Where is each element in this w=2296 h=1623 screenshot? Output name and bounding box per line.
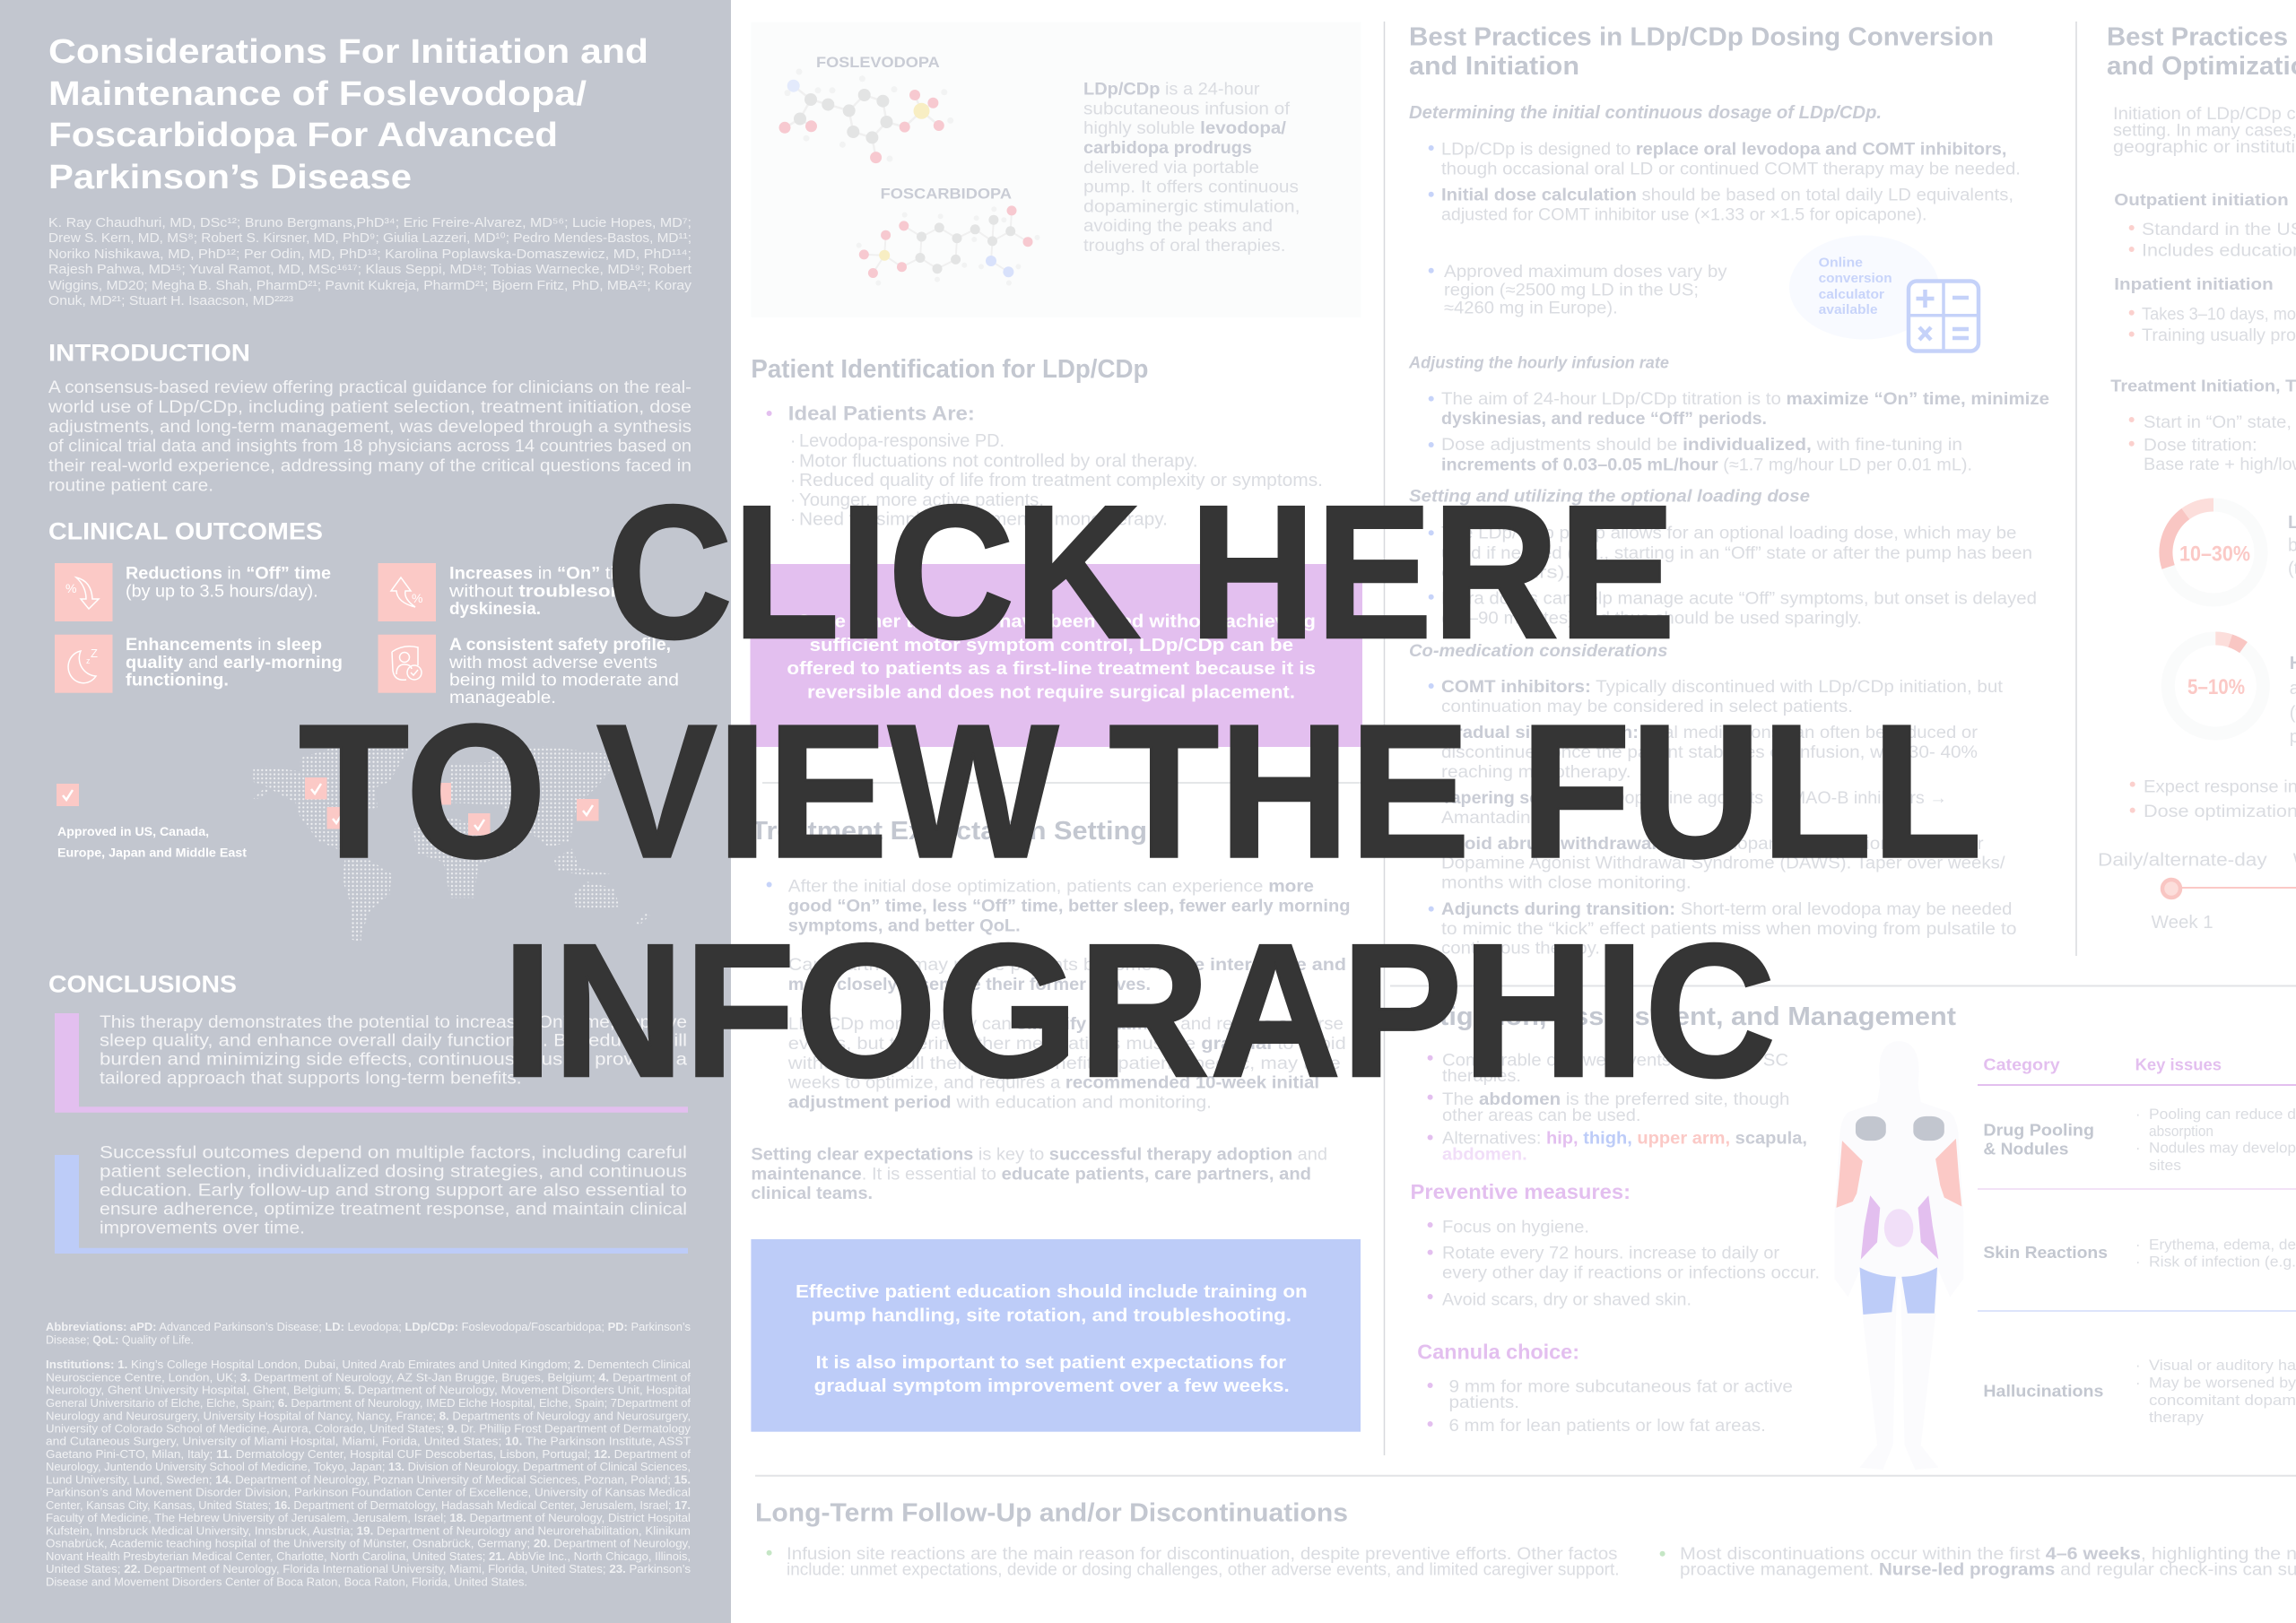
chart: high rate donut 5-10% xyxy=(2168,638,2296,747)
response bullets xyxy=(2130,778,2296,821)
section: long-term follow-up xyxy=(755,1499,2296,1580)
bullet group: initial dose: ≈4260 mg in Europe). xyxy=(1444,299,1618,317)
outcome: off time xyxy=(55,563,331,621)
heading: Best Practices xyxy=(2107,23,2288,52)
approval text xyxy=(57,825,248,859)
subheading: co-medication: Co-medication considerations xyxy=(1409,642,1667,661)
ideal patients list xyxy=(790,431,1323,530)
institutions: Center, Kansas City, Kansas, United States; 16. Department of Dermatology, Hadassah Medical Center, Jerusalem, Israel; 17. xyxy=(46,1498,691,1512)
row: hallucinations: May be worsened by xyxy=(2149,1376,2296,1392)
institutions: General Universitario of Elche, Elche, Spain; 6. Department of Neurology, IMED Elche Hospital, Elche, Spain; 7Department of xyxy=(46,1396,691,1410)
bullet group: loading dose: used if needed (e.g., starting in an “Off” state or after the pump has been xyxy=(1441,544,2032,563)
outcome: sleep: quality and early-morning xyxy=(126,654,343,673)
bullet: discontinuation reasons: include: unmet expectations, devide or dosing challenges, other adverse events, and limited caregiver support. xyxy=(787,1561,1620,1580)
title: Considerations For Initiation and xyxy=(48,33,648,71)
row: drug pooling: Pooling can reduce d xyxy=(2149,1107,2296,1123)
bullet group: co-medication: discontinued once the patient stabilizes on infusion, with 30- 40% xyxy=(1441,743,1978,762)
conclusion 1: tailored approach that supports long-term benefits. xyxy=(100,1070,522,1089)
conclusion 2: patient selection, individualized dosing strategies, and continuous xyxy=(100,1163,687,1182)
ideal patients list: Motor fluctuations not controlled by oral therapy. xyxy=(799,451,1198,471)
site bullets: The abdomen is the preferred site, though xyxy=(1442,1090,1789,1109)
chart: low rate donut 10-30% xyxy=(2166,505,2296,600)
title: Foscarbidopa For Advanced xyxy=(48,117,558,154)
outcome: sleep xyxy=(55,635,343,693)
heading: Mitigation, Assessment, and Management xyxy=(1409,1002,1956,1031)
outcome: off time: Reductions in “Off” time xyxy=(126,565,331,584)
row: hallucinations: Hallucinations xyxy=(1983,1382,2103,1400)
table header: Category xyxy=(1983,1056,2060,1074)
introduction text: world use of LDp/CDp, including patient selection, treatment initiation, dose xyxy=(48,398,691,417)
bullet: benefits: good “On” time, less “Off” time, better sleep, fewer early morning xyxy=(788,898,1351,916)
bullet: care partners: Care partners may notice patients become more interactive and xyxy=(788,956,1346,975)
ideal patients list: · xyxy=(790,511,796,530)
bullet group: initial dose: adjusted for COMT inhibitor use (×1.33 or ×1.5 for opicapone). xyxy=(1441,205,1926,224)
response bullets: Dose optimization xyxy=(2144,803,2296,821)
row: drug pooling: · xyxy=(2135,1107,2140,1123)
row: hallucinations: · xyxy=(2135,1376,2140,1392)
bullet group: co-medication: Amantadine. xyxy=(1441,809,1546,828)
site bullets: Comparable or fewer events than other SC xyxy=(1442,1051,1788,1070)
bullet group: co-medication: COMT inhibitors: Typically discontinued with LDp/CDp initiation, but xyxy=(1441,678,2004,697)
heading: Best Practices in LDp/CDp Dosing Conversion xyxy=(1409,23,1994,52)
callout: first-line treatment: sufficient motor symptom control, LDp/CDp can be xyxy=(810,636,1293,655)
introduction text xyxy=(48,378,691,496)
title xyxy=(48,33,648,196)
outcome: sleep: Z xyxy=(91,647,98,660)
abbreviations: Abbreviations: aPD: Advanced Parkinson’s Disease; LD: Levodopa; LDp/CDp: Foslevodopa/Foscarbidopa; PD: Parkinson’s xyxy=(46,1320,691,1333)
abbreviations: Disease; QoL: Quality of Life. xyxy=(46,1332,194,1346)
panel: molecules and LDp/CDp description xyxy=(751,22,1361,317)
row: hallucinations: concomitant dopam xyxy=(2149,1393,2296,1409)
ideal patients list: Need for simplified regimen or monotherapy. xyxy=(799,510,1168,530)
section: setting and optimization xyxy=(2098,23,2296,933)
response bullets: Expect response in xyxy=(2144,778,2296,797)
outcome: off time: % xyxy=(65,581,76,595)
institutions: Disease and Movement Disorders Center of Boca Raton, Boca Raton, Florida, United States. xyxy=(46,1575,527,1588)
row: drug pooling: Drug Pooling xyxy=(1983,1122,2094,1140)
institutions: Kufstein, Innsbruck Medical University, Innsbruck, Austria; 19. Department of Neurology and Neurorehabilitation, Klinikum xyxy=(46,1524,691,1538)
row: drug pooling: & Nodules xyxy=(1983,1141,2068,1159)
conclusion 1 xyxy=(55,1013,688,1113)
intro text: Initiation of LDp/CDp ca xyxy=(2113,105,2296,124)
site bullets: other areas can be used. xyxy=(1442,1107,1641,1125)
bullet: monotherapy: adjustment period with education and monitoring. xyxy=(788,1094,1212,1112)
outpatient initiation: Standard in the US xyxy=(2142,221,2296,239)
bullet group: loading dose: off for hours). xyxy=(1441,564,1570,583)
bullet group: co-medication: continuous therapy. xyxy=(1441,940,1600,959)
row: hallucinations: therapy xyxy=(2149,1410,2205,1426)
molecule: foslevodopa xyxy=(778,68,953,163)
bullet group: initial dose: Approved maximum doses vary by xyxy=(1444,263,1727,282)
bullet group: initial dose: though occasional oral LD or continued COMT therapy may be needed. xyxy=(1441,160,2021,178)
left sidebar panel xyxy=(0,0,731,1623)
site bullets xyxy=(1428,1051,1807,1164)
timeline: Daily/alternate-day xyxy=(2098,850,2267,870)
molecule label: foscarbidopa: FOSCARBIDOPA xyxy=(881,185,1012,202)
introduction text: their real-world experience, addressing many of the critical questions faced in xyxy=(48,457,691,475)
outcome: on time: dyskinesia. xyxy=(449,600,541,619)
bullet group: co-medication xyxy=(1429,678,2016,959)
overlay call to action: TO VIEW THE FULL xyxy=(299,685,1982,897)
bullet group: co-medication: Gradual simplification: Oral medications can often be reduced or xyxy=(1441,724,1979,742)
bullet: timing xyxy=(1660,1545,2296,1580)
bullet group: co-medication: Avoid abrupt withdrawal: Abrupt dopamine reduction can trigger xyxy=(1441,835,1984,854)
bullet group: hourly rate xyxy=(1429,390,2049,474)
description text: dopaminergic stimulation, xyxy=(1083,197,1300,217)
row: skin reactions: Erythema, edema, de xyxy=(2149,1237,2296,1254)
bullet group: loading dose: (60–90 minutes) and thus should be used sparingly. xyxy=(1441,609,1862,628)
bullet: monotherapy: weeks to optimize, and requires a recommended 10-week initial xyxy=(787,1074,1319,1092)
expectations paragraph: Setting clear expectations is key to successful therapy adoption and xyxy=(751,1146,1327,1165)
bullet: monotherapy: LDp/CDp monotherapy can simplify treatment and reduce adverse xyxy=(788,1015,1344,1034)
row: skin reactions: Risk of infection (e.g. xyxy=(2149,1254,2296,1270)
institutions: Neuroscience Centre, London, UK; 3. Department of Neurology, AZ St-Jan Brugge, Bruges, Belgium; 4. Department of xyxy=(46,1371,691,1384)
inpatient initiation: Inpatient initiation xyxy=(2114,275,2274,293)
institutions: Neurology, Juntendo University School of Medicine, Tokyo, Japan; 13. Division of Neurology, Department of Clinical Sciences, xyxy=(46,1460,691,1473)
overlay call to action: INFOGRAPHIC xyxy=(502,904,1776,1116)
row: hallucinations: · xyxy=(2135,1358,2140,1374)
ideal patients list: · xyxy=(790,452,796,471)
outcome: on time: Increases in “On” time xyxy=(449,565,639,584)
approval text: Approved in US, Canada, xyxy=(57,825,209,838)
ideal patients list: Younger, more active patients. xyxy=(799,490,1044,510)
ideal patients list: Reduced quality of life from treatment complexity or symptoms. xyxy=(799,471,1323,490)
abbreviations xyxy=(46,1320,691,1346)
timeline xyxy=(2098,850,2296,933)
preventive measures xyxy=(1410,1180,1820,1309)
bullet group: co-medication: Adjuncts during transition: Short-term oral levodopa may be needed xyxy=(1441,900,2013,919)
institutions: Institutions: 1. King’s College Hospital London, Dubai, United Arab Emirates and United Kingdom; 2. Dementech Clinical xyxy=(46,1358,691,1371)
timeline: Week 1 xyxy=(2152,913,2213,933)
bullet: benefits: After the initial dose optimization, patients can experience more xyxy=(788,878,1314,897)
heading: Patient Identification for LDp/CDp xyxy=(751,355,1148,384)
outpatient initiation: Includes education xyxy=(2142,242,2296,261)
callout: patient education: Effective patient education should include training on xyxy=(796,1282,1308,1302)
icon: conversion calculator: Online xyxy=(1819,255,1863,271)
description text: LDp/CDp is a 24-hour xyxy=(1083,81,1260,100)
conclusion 2: Successful outcomes depend on multiple factors, including careful xyxy=(100,1144,687,1163)
treatment initiation: Dose titration: xyxy=(2144,436,2257,456)
bullet group: co-medication: months with close monitoring. xyxy=(1441,874,1692,893)
bullet: discontinuation reasons xyxy=(767,1545,1620,1580)
callout: first-line treatment: Once other therapies have been tried without achieving xyxy=(796,612,1316,632)
preventive measures: Focus on hygiene. xyxy=(1442,1218,1589,1237)
bullet: care partners xyxy=(767,956,1346,994)
authors: Rajesh Pahwa, MD¹⁵; Yuval Ramot, MD, MSc¹⁶¹⁷; Klaus Seppi, MD¹⁸; Tobias Warnecke, MD¹⁹; Robert xyxy=(48,263,691,277)
chart: high rate donut 5-10%: 5–10% xyxy=(2187,675,2245,699)
title: Parkinson’s Disease xyxy=(48,159,412,196)
bullet group: loading dose xyxy=(1429,525,2037,628)
bullet: timing: proactive management. Nurse-led programs and regular check-ins can sup xyxy=(1680,1561,2296,1580)
bullet: benefits: symptoms, and better QoL. xyxy=(788,916,1021,935)
expectations paragraph: clinical teams. xyxy=(751,1185,873,1203)
callout: patient education: It is also important to set patient expectations for xyxy=(816,1353,1286,1373)
preventive measures: Rotate every 72 hours. increase to daily or xyxy=(1442,1244,1780,1263)
outcome: on time: % xyxy=(412,591,422,605)
callout: first-line treatment xyxy=(750,564,1362,747)
preventive measures: Preventive measures: xyxy=(1410,1180,1631,1203)
outcome: sleep: z xyxy=(86,656,91,665)
treatment initiation: Start in “On” state, xyxy=(2144,413,2292,432)
institutions: Faculty of Medicine, The Hebrew University of Jerusalem, Jerusalem, Israel; 18. Department of Neurology, District Hospital xyxy=(46,1511,691,1524)
row: skin reactions: Skin Reactions xyxy=(1983,1244,2108,1262)
introduction text: A consensus-based review offering practical guidance for clinicians on the real- xyxy=(48,378,691,397)
treatment initiation: Base rate + high/low xyxy=(2144,456,2296,474)
overlay call to action: CLICK HERE xyxy=(606,465,1675,678)
outcome: on time xyxy=(378,563,639,621)
chart: low rate donut 10-30%: 10–30% xyxy=(2179,542,2250,566)
treatment initiation: Treatment Initiation, T xyxy=(2110,377,2296,395)
description text: pump. It offers continuous xyxy=(1083,178,1299,197)
icon: conversion calculator: calculator xyxy=(1819,287,1884,302)
outcome: sleep: Enhancements in sleep xyxy=(126,636,322,655)
institutions: Osnabrück, Academic teaching hospital of the University of Münster, Osnabrück, Germany; 20. Department of Neurology, xyxy=(46,1537,691,1550)
legend: approval check xyxy=(57,784,79,806)
intro text: geographic or institutio xyxy=(2113,138,2296,157)
inpatient initiation xyxy=(2114,275,2296,345)
bullet group: initial dose xyxy=(1429,140,2021,317)
authors: K. Ray Chaudhuri, MD, DSc¹²; Bruno Bergmans,PhD³⁴; Eric Freire-Alvarez, MD⁵⁶; Lucie Hopes, MD⁷; xyxy=(48,216,691,230)
ideal patients list: · xyxy=(790,432,796,451)
bullet: monotherapy: events, but tapering other medications must be gradual to avoid xyxy=(788,1035,1346,1054)
outcome: sleep: functioning. xyxy=(126,671,229,690)
row: drug pooling: sites xyxy=(2149,1158,2181,1174)
row: skin reactions xyxy=(1983,1237,2296,1270)
outpatient initiation: Outpatient initiation xyxy=(2114,191,2289,209)
outcome: safety: manageable. xyxy=(449,689,556,707)
bullet group: co-medication: continuation may be considered in select patients. xyxy=(1441,698,1853,716)
cannula choice xyxy=(1417,1340,1793,1436)
bullet group: loading dose: Extra doses can help manage acute “Off” symptoms, but onset is delayed xyxy=(1441,590,2037,609)
institutions: Neurology and Neurosurgery, University Hospital of Nancy, Nancy, France; 8. Departments of Neurology and Neurosurgery, xyxy=(46,1409,691,1422)
subheading: initial dosage: Determining the initial continuous dosage of LDp/CDp. xyxy=(1409,103,1882,123)
callout: patient education: pump handling, site rotation, and troubleshooting. xyxy=(811,1306,1292,1325)
bullet group: co-medication: reaching monotherapy. xyxy=(1441,763,1631,782)
molecule label: foslevodopa: FOSLEVODOPA xyxy=(816,54,940,71)
section: dosing conversion and initiation xyxy=(1408,23,2049,959)
conclusion 2: ensure adherence, optimize treatment response, and maintain clinical xyxy=(100,1200,687,1219)
institutions: United States; 22. Department of Neurology, Florida International University, Miami, Florida, United States; 23. Parkinson’s xyxy=(46,1562,691,1575)
authors: Drew S. Kern, MD, MS⁸; Robert S. Kirsner, MD, PhD⁹; Giulia Lazzeri, MD¹⁰; Pedro Mendes-Bastos, MD¹¹; xyxy=(48,231,691,246)
title: Maintenance of Foslevodopa/ xyxy=(48,75,587,113)
bullet: timing: Most discontinuations occur within the first 4–6 weeks , highlighting the ne xyxy=(1680,1545,2296,1564)
heading: Long-Term Follow-Up and/or Discontinuations xyxy=(755,1499,1348,1528)
bullet xyxy=(767,411,772,416)
outcome: safety: A consistent safety profile, xyxy=(449,636,671,655)
site bullets: therapies. xyxy=(1442,1067,1521,1086)
preventive measures: Avoid scars, dry or shaved skin. xyxy=(1442,1291,1692,1309)
intro text xyxy=(2113,105,2296,157)
cannula choice: 9 mm for more subcutaneous fat or active xyxy=(1449,1377,1793,1396)
treatment initiation xyxy=(2110,377,2296,474)
institutions xyxy=(46,1358,691,1588)
outpatient initiation xyxy=(2114,191,2296,261)
institutions: Parkinson’s and Movement Disorder Division, Parkinson Foundation Center of Excellence, University of Kansas Medical xyxy=(46,1486,691,1499)
conclusion 2 xyxy=(55,1144,688,1254)
section: site selection and management xyxy=(1409,1002,2296,1470)
conclusion 1: sleep quality, and enhance overall daily functioning. By reducing pill xyxy=(100,1032,687,1051)
description text: avoiding the peaks and xyxy=(1083,217,1273,236)
site bullets: Alternatives: hip, thigh, upper arm, scapula, xyxy=(1442,1130,1807,1149)
expectations paragraph: maintenance . It is essential to educate patients, care partners, and xyxy=(751,1165,1311,1184)
introduction text: routine patient care. xyxy=(48,477,213,496)
outcome: safety: with most adverse events xyxy=(448,654,657,673)
ideal patients list: · xyxy=(790,491,796,510)
bullet group: hourly rate: The aim of 24-hour LDp/CDp titration is to maximize “On” time, minimize xyxy=(1441,390,2049,409)
row: drug pooling: · xyxy=(2135,1141,2140,1157)
row: hallucinations: Visual or auditory ha xyxy=(2149,1358,2296,1374)
bullet group: co-medication: Dopamine Agonist Withdrawal Syndrome (DAWS). Taper over weeks/ xyxy=(1441,855,2005,873)
institutions: Neurology, Ghent University Hospital, Ghent, Belgium; 5. Department of Neurology, Movement Disorders Unit, Hospital xyxy=(46,1384,691,1397)
table header: Key issues xyxy=(2135,1056,2222,1074)
outcome: safety xyxy=(378,635,679,707)
molecule: foscarbidopa xyxy=(857,205,1040,285)
description text: troughs of oral therapies. xyxy=(1083,237,1285,256)
callout: patient education xyxy=(751,1239,1361,1432)
conclusions heading: CONCLUSIONS xyxy=(48,971,237,998)
description text: delivered via portable xyxy=(1083,159,1259,178)
authors: Onuk, MD²¹; Stuart H. Isaacson, MD²²²³ xyxy=(48,294,293,308)
bullet group: hourly rate: Dose adjustments should be individualized, with fine-tuning in xyxy=(1441,436,1962,455)
heading: and Initiation xyxy=(1409,52,1579,81)
ideal patients list: Levodopa-responsive PD. xyxy=(799,431,1004,451)
body diagram: infusion sites xyxy=(1835,1041,1963,1470)
clinical outcomes heading: CLINICAL OUTCOMES xyxy=(48,518,323,545)
institutions: University of Colorado School of Medicine, Aurora, Colorado, United States; 9. Dr. Phillip Frost Department of Dermatology xyxy=(46,1422,691,1436)
institutions: Gaetano Pini-CTO, Milan, Italy; 11. Dermatology Center, Hospital CUF Descobertas, Lisbon, Portugal; 12. Department of xyxy=(46,1447,691,1461)
row: skin reactions: · xyxy=(2135,1254,2140,1270)
bullet: monotherapy xyxy=(767,1015,1346,1112)
row: drug pooling: absorption xyxy=(2149,1124,2213,1140)
introduction text: adjustments, and long-term management, was developed through a synthesis xyxy=(48,418,691,437)
bullet group: hourly rate: increments of 0.03–0.05 mL/hour (≈1.7 mg/hour LD per 0.01 mL). xyxy=(1441,456,1972,474)
authors: Noriko Nishikawa, MD, PhD¹²; Per Odin, MD, PhD¹³; Karolina Poplawska-Domaszewicz, MD, PhD¹¹⁴; xyxy=(48,247,691,262)
institutions: and Cutaneous Surgery, University of Miami Hospital, Miami, Forida, United States; 10. The Parkinson Institute, ASST xyxy=(46,1435,691,1448)
conclusion 2: education. Early follow-up and strong support are also essential to xyxy=(100,1181,687,1200)
callout: first-line treatment: offered to patients as a first-line treatment because it is xyxy=(787,659,1316,679)
row: skin reactions: · xyxy=(2135,1237,2140,1254)
ideal patients list: · xyxy=(790,472,796,490)
heading: Treatment Expectation Setting xyxy=(751,817,1147,846)
authors: Wiggins, MD20; Megha B. Shah, PharmD²¹; Pavnit Kukreja, PharmD²¹; Bjoern Fritz, PhD, MBA²¹; Koray xyxy=(48,279,692,293)
description text: carbidopa prodrugs xyxy=(1083,139,1252,158)
callout: patient education: gradual symptom improvement over a few weeks. xyxy=(814,1376,1290,1396)
bullet: benefits xyxy=(767,878,1351,935)
icon: conversion calculator: available xyxy=(1819,302,1878,317)
outcome: off time: (by up to 3.5 hours/day). xyxy=(126,583,318,602)
bullet group: loading dose: The LDp/CDp pump allows for an optional loading dose, which may be xyxy=(1441,525,2016,543)
bullet group: initial dose: region (≈2500 mg LD in the US; xyxy=(1444,281,1699,299)
conclusion 1: This therapy demonstrates the potential to increase “On” time, improve xyxy=(100,1013,687,1032)
callout: first-line treatment: reversible and does not require surgical placement. xyxy=(807,682,1295,702)
outcome: on time: without troublesome xyxy=(448,583,639,602)
icon: conversion calculator xyxy=(1789,235,1979,352)
row: hallucinations xyxy=(1983,1358,2296,1426)
site bullets: abdomen. xyxy=(1442,1145,1527,1164)
inpatient initiation: Training usually pro xyxy=(2142,326,2296,345)
conclusion 2: improvements over time. xyxy=(100,1219,305,1237)
bullet group: hourly rate: dyskinesias, and reduce “Off” periods. xyxy=(1441,410,1767,429)
section: treatment expectation setting xyxy=(751,817,1361,1432)
row: drug pooling: Nodules may develop xyxy=(2149,1141,2296,1157)
heading xyxy=(1409,23,1994,81)
institutions: Novant Health Presbyterian Medical Center, Charlotte, North Carolina, United States; 21. AbbVie Inc., North Chicago, Illinois, xyxy=(46,1549,691,1563)
cannula choice: Cannula choice: xyxy=(1417,1340,1579,1363)
description text: highly soluble levodopa/ xyxy=(1083,119,1287,138)
cannula choice: 6 mm for lean patients or low fat areas. xyxy=(1449,1417,1766,1436)
outcome: safety: being mild to moderate and xyxy=(449,671,679,690)
expectations paragraph xyxy=(751,1146,1327,1203)
section: patient identification xyxy=(750,355,1362,747)
intro text: setting. In many cases, i xyxy=(2113,122,2296,141)
bullet: discontinuation reasons: Infusion site reactions are the main reason for discontinuation, despite preventive efforts. Other factos xyxy=(787,1545,1618,1564)
overlay call to action xyxy=(299,465,1982,1116)
institutions: Lund University, Lund, Sweden; 14. Department of Neurology, Poznan University of Medical Sciences, Poznan, Poland; 15. xyxy=(46,1472,691,1486)
authors xyxy=(48,216,692,308)
conclusion 1: burden and minimizing side effects, continuous infusion provides a xyxy=(100,1051,687,1070)
table header xyxy=(1983,1056,2222,1074)
subheading: loading dose: Setting and utilizing the optional loading dose xyxy=(1409,488,1810,507)
bullet group: co-medication: to mimic the “kick” effect patients miss when moving from pulsatile to xyxy=(1441,920,2016,939)
description text: subcutaneous infusion of xyxy=(1083,100,1291,118)
description text xyxy=(1083,81,1300,256)
subheading: hourly infusion: Adjusting the hourly infusion rate xyxy=(1408,354,1669,372)
approval markers xyxy=(305,777,599,836)
ideal patients heading: Ideal Patients Are: xyxy=(788,403,975,425)
cannula choice: patients. xyxy=(1449,1393,1519,1412)
dotted world map xyxy=(253,746,649,942)
icon: conversion calculator: conversion xyxy=(1819,271,1892,286)
bullet: care partners: more closely resemble their former selves. xyxy=(788,976,1151,994)
heading xyxy=(2107,23,2296,81)
introduction text: of clinical trial data and insights from 18 physicians across 14 countries based on xyxy=(48,438,691,456)
approval text: Europe, Japan and Middle East xyxy=(57,846,248,859)
bullet group: co-medication: Tapering sequence: Dopamine agonists → MAO-B inhibitors → xyxy=(1441,789,1947,808)
introduction heading: INTRODUCTION xyxy=(48,340,250,367)
row: drug pooling xyxy=(1983,1107,2296,1174)
bullet group: initial dose: LDp/CDp is designed to replace oral levodopa and COMT inhibitors, xyxy=(1441,140,2007,160)
table: adverse events xyxy=(1978,1056,2296,1426)
bullet group: initial dose: Initial dose calculation should be based on total daily LD equivalents, xyxy=(1441,187,2013,205)
bullet: monotherapy: withdrawal. Full therapeutic benefit is patient-specific, may take xyxy=(787,1055,1341,1073)
preventive measures: every other day if reactions or infections occur. xyxy=(1442,1264,1820,1283)
